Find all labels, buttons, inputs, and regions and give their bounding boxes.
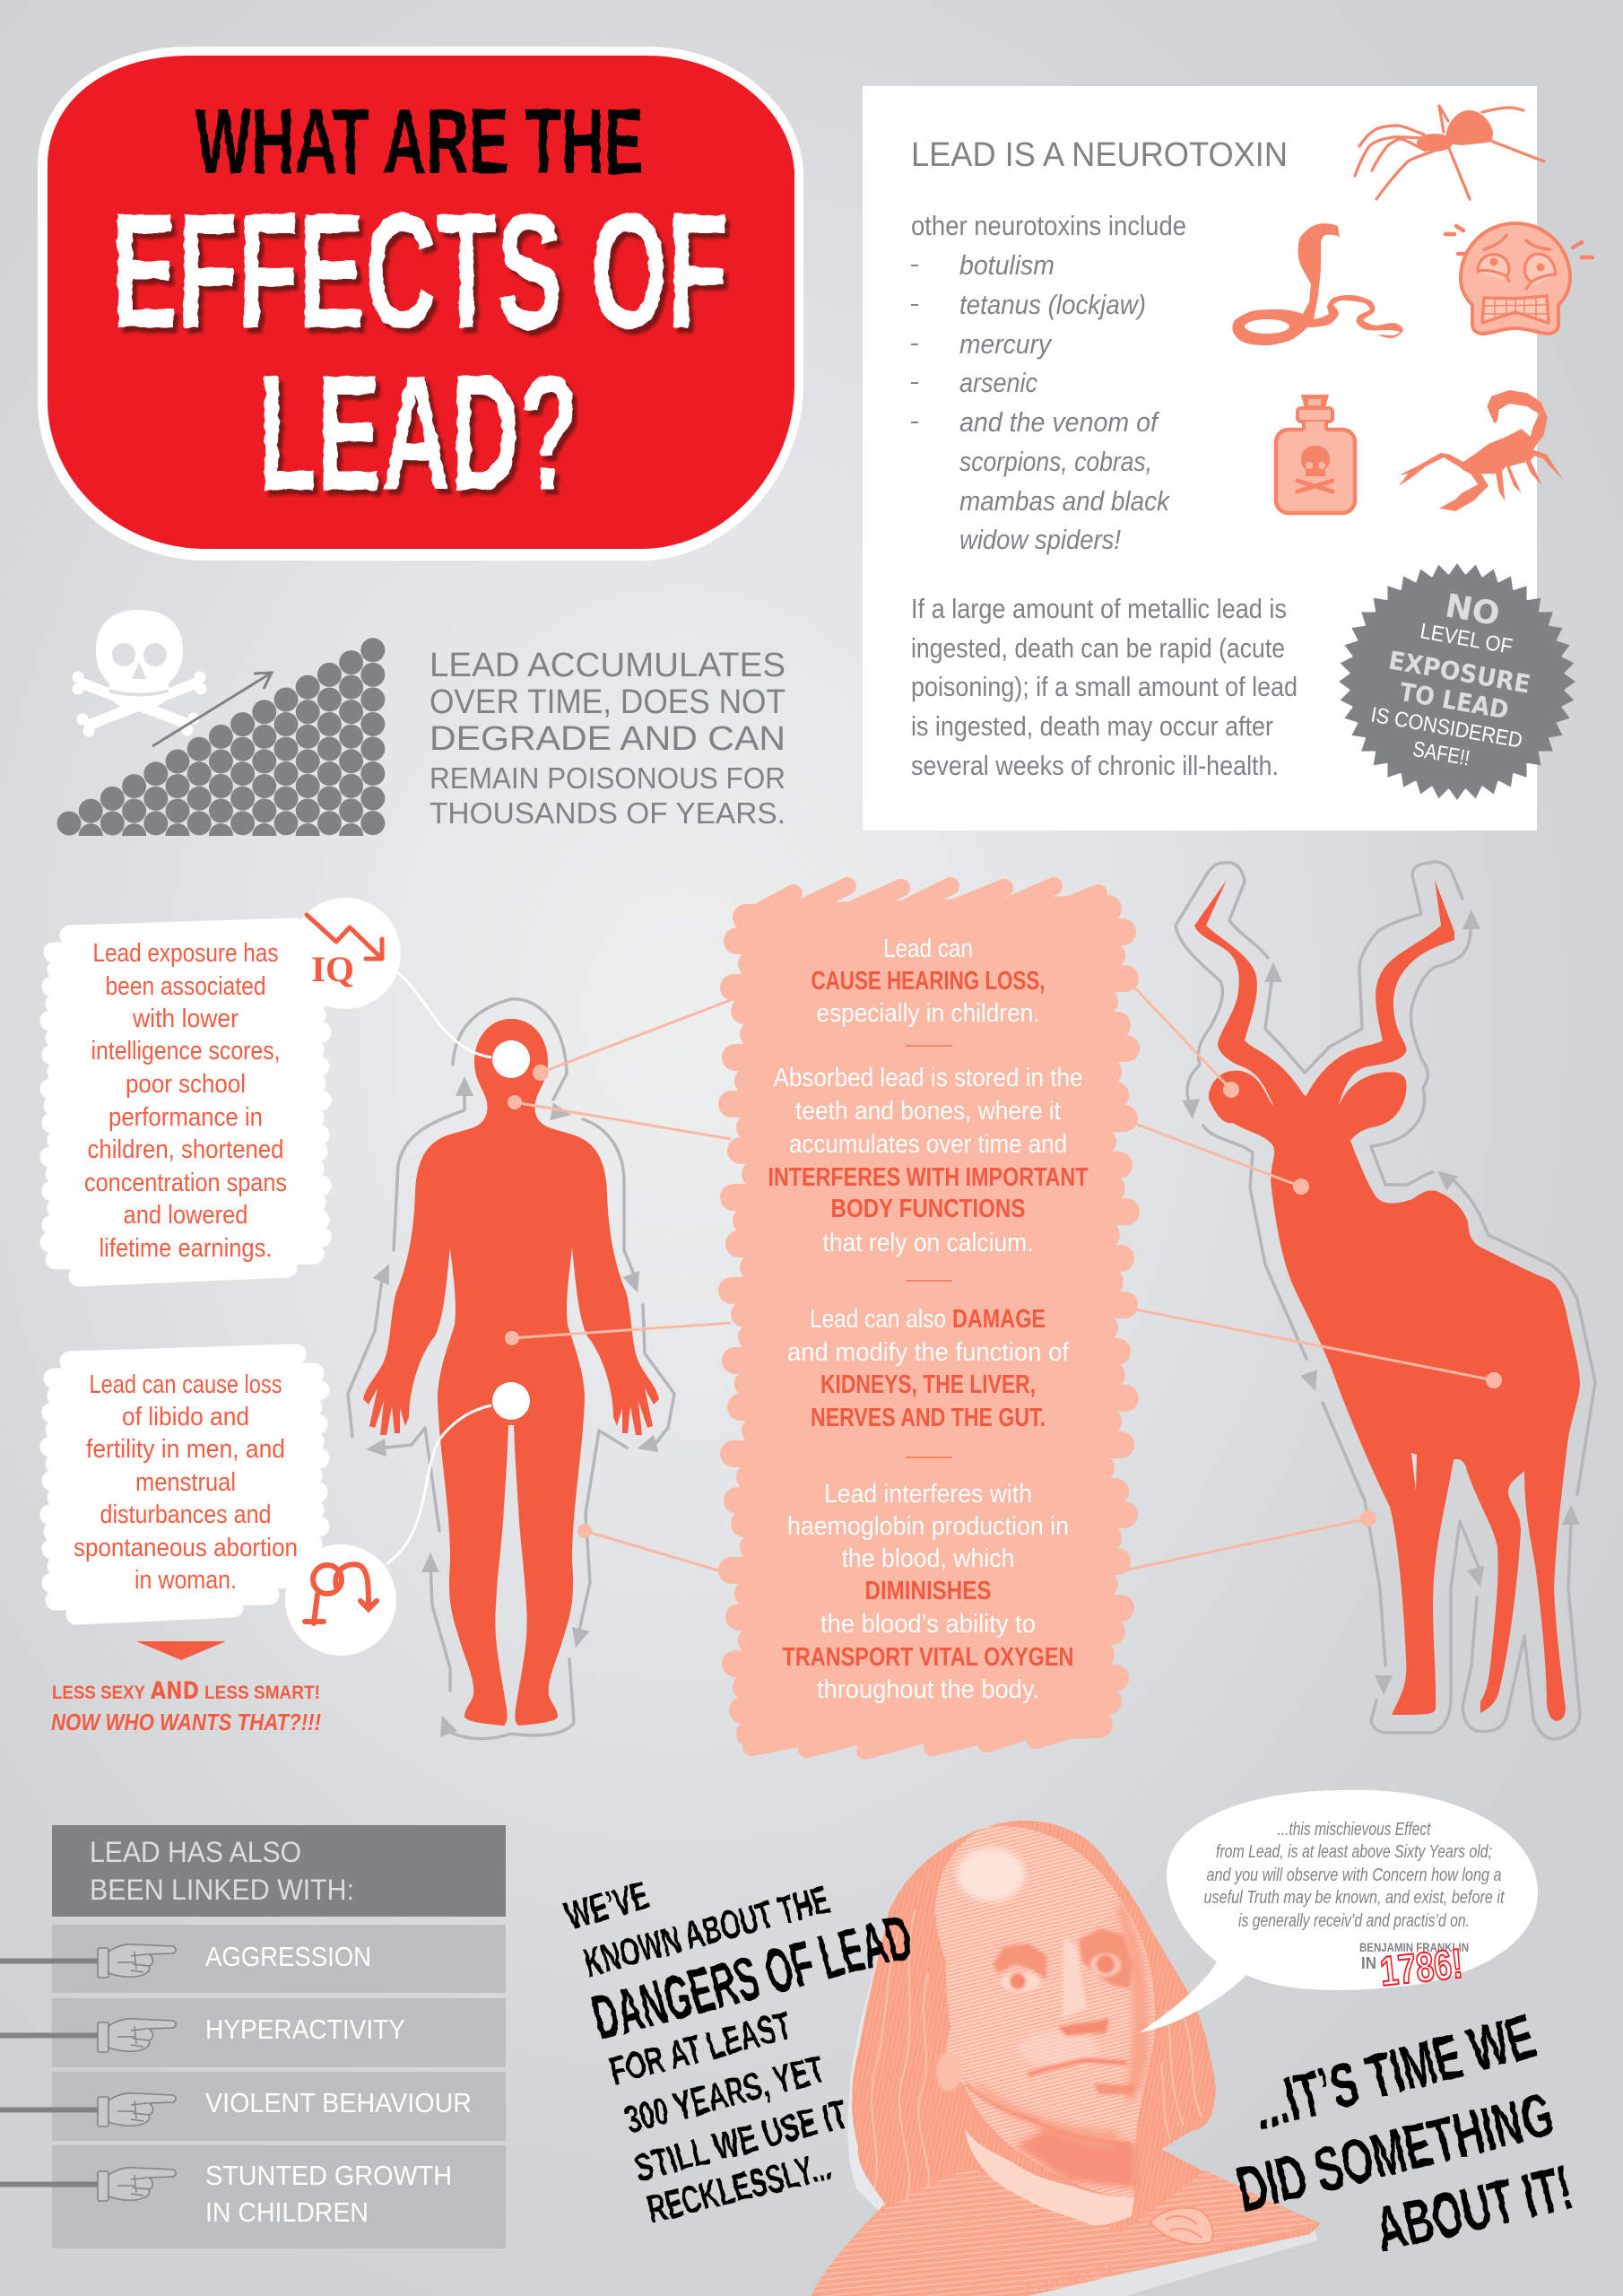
bubble shape	[1140, 1790, 1538, 2032]
text: haemoglobin: TRANSPORT VITAL OXYGEN	[782, 1643, 1074, 1672]
text: lead accumulates: THOUSANDS OF YEARS.	[430, 796, 785, 830]
icon: IQ circle	[290, 898, 401, 1009]
bubble text: menstrual	[135, 1468, 236, 1497]
bubble text	[74, 1370, 298, 1595]
icon: scorpion	[1399, 390, 1563, 511]
slogan: we've known: KNOWN ABOUT THE	[579, 1878, 834, 1986]
panel: center effects box	[732, 886, 1126, 1751]
quote text: from Lead, is at least above Sixty Years old;	[1216, 1842, 1492, 1862]
row: aggression: AGGRESSION	[205, 1941, 371, 1972]
right ear	[1339, 1072, 1406, 1141]
bubble text: been associated	[106, 972, 265, 1001]
deer circulation outline	[1176, 862, 1595, 1739]
title: lead?: LEAD?	[258, 340, 578, 525]
portrait: benjamin franklin	[811, 1821, 1321, 2296]
row: violent behaviour	[0, 2072, 506, 2141]
bubble text: in woman.	[135, 1566, 237, 1595]
header: BEEN LINKED WITH:	[90, 1874, 354, 1906]
coat	[811, 2170, 1318, 2296]
text: hearing loss: CAUSE HEARING LOSS,	[811, 967, 1046, 996]
paragraph: lead ingestion: If a large amount of metallic lead is	[911, 593, 1287, 624]
text: teeth and bones: that rely on calcium.	[823, 1229, 1033, 1257]
text: kidneys: DAMAGE	[952, 1305, 1046, 1334]
text: teeth and bones: INTERFERES WITH IMPORTANT	[768, 1163, 1089, 1192]
list of neurotoxins: arsenic	[959, 367, 1037, 398]
callout: less sexy and less smart: AND	[151, 1677, 199, 1705]
text: haemoglobin: DIMINISHES	[864, 1577, 992, 1605]
slogan: it's time	[1230, 2001, 1579, 2266]
title red fill	[48, 56, 794, 549]
text: lead accumulates: LEAD ACCUMULATES	[430, 647, 785, 684]
text: haemoglobin: the blood’s ability to	[820, 1610, 1036, 1639]
badge: no level of exposure	[1289, 514, 1623, 849]
slogan: we've known: RECKLESSLY...	[643, 2144, 836, 2232]
text: kidneys: NERVES AND THE GUT.	[811, 1404, 1046, 1432]
title: effects of: EFFECTS OF	[111, 178, 728, 362]
left horn	[1194, 880, 1305, 1105]
title panel	[38, 47, 803, 561]
face	[935, 1826, 1155, 2197]
header	[52, 1825, 506, 1917]
attribution: BENJAMIN FRANKLIN	[1359, 1940, 1469, 1954]
banknote strip	[1018, 2226, 1318, 2296]
rising arrow	[152, 673, 272, 746]
text: haemoglobin: haemoglobin production in	[787, 1512, 1069, 1541]
row: hyperactivity: HYPERACTIVITY	[205, 2013, 405, 2045]
panel background	[863, 86, 1537, 831]
text: haemoglobin: Lead interferes with	[824, 1480, 1032, 1509]
bubble text: Lead can cause loss	[90, 1370, 282, 1399]
coat and hair silhouette	[811, 1821, 1321, 2296]
bubble text: intelligence scores,	[91, 1037, 280, 1065]
list of neurotoxins: mambas and black	[959, 485, 1170, 517]
box background	[732, 886, 1126, 1751]
row: aggression	[0, 1925, 506, 1993]
connector lines	[512, 978, 1494, 1574]
slogan: we've known: FOR AT LEAST	[605, 2004, 796, 2094]
callout: less sexy and less smart: NOW WHO WANTS THAT?!!!	[51, 1709, 321, 1735]
text: kidneys	[787, 1305, 1070, 1432]
text: teeth and bones	[768, 1064, 1089, 1257]
deer figure	[1194, 880, 1580, 1721]
paragraph: lead ingestion	[911, 593, 1298, 781]
bubble shape	[50, 1354, 319, 1614]
text: lead accumulates: REMAIN POISONOUS FOR	[430, 761, 785, 795]
brows, eyes, nose and mouth	[936, 1928, 1136, 2144]
bubble text: fertility in men, and	[86, 1435, 285, 1464]
bubble text: lifetime earnings.	[99, 1234, 273, 1263]
row: violent behaviour: VIOLENT BEHAVIOUR	[205, 2087, 472, 2118]
paragraph: lead ingestion: is ingested, death may occur after	[911, 710, 1273, 742]
text: teeth and bones: teeth and bones, where it	[795, 1097, 1061, 1126]
title outline	[38, 47, 803, 561]
marker dots	[505, 1065, 1502, 1538]
text: kidneys: KIDNEYS, THE LIVER,	[820, 1370, 1036, 1399]
human figure	[363, 1019, 659, 1726]
callout: less sexy and less smart	[51, 1641, 321, 1735]
bubble: intelligence	[50, 898, 401, 1276]
bubble text: Lead exposure has	[93, 939, 278, 968]
skull and lead pile graphic	[69, 610, 373, 837]
list of neurotoxins: widow spiders!	[959, 524, 1121, 555]
row: stunted growth	[0, 2145, 506, 2248]
slogan: we've known: WE’VE	[560, 1874, 654, 1939]
bubble text: and lowered	[124, 1201, 247, 1230]
text: hearing loss: especially in children.	[816, 999, 1040, 1028]
list of neurotoxins: scorpions, cobras,	[959, 446, 1152, 477]
text: lead accumulates: OVER TIME, DOES NOT	[430, 683, 785, 721]
list of neurotoxins: and the venom of	[959, 406, 1160, 438]
text: lead accumulates: DEGRADE AND CAN	[430, 720, 785, 758]
icon: IQ circle: IQ	[311, 949, 354, 989]
quote text: ...this mischievous Effect	[1277, 1820, 1432, 1839]
collar rose	[1150, 2208, 1213, 2244]
badge: no level of exposure: EXPOSURE	[1386, 646, 1532, 700]
list of neurotoxins: other neurotoxins include	[911, 210, 1186, 241]
quote text: is generally receiv’d and practis’d on.	[1238, 1911, 1470, 1931]
row: hyperactivity	[0, 1998, 506, 2067]
text: lead accumulates	[430, 647, 785, 830]
row: stunted growth: IN CHILDREN	[205, 2196, 369, 2228]
bubble text: concentration spans	[84, 1169, 287, 1197]
year 1786: 1786!	[1378, 1940, 1465, 1995]
panel: neurotoxin	[863, 86, 1623, 849]
human circulation outline	[348, 999, 674, 1739]
slogan: we've known: 300 YEARS, YET	[621, 2047, 829, 2143]
badge: no level of exposure: SAFE!!	[1410, 737, 1471, 770]
bubble text: poor school	[126, 1070, 246, 1099]
neck cloth	[965, 2128, 1134, 2225]
text: teeth and bones: BODY FUNCTIONS	[830, 1195, 1026, 1223]
text: kidneys: and modify the function of	[787, 1338, 1070, 1367]
text: teeth and bones: Absorbed lead is stored in the	[773, 1064, 1083, 1092]
header: LEAD HAS ALSO	[90, 1836, 301, 1868]
bubble text: with lower	[132, 1004, 239, 1033]
title: what are the: WHAT ARE THE	[195, 90, 644, 193]
bubble text: disturbances and	[100, 1500, 271, 1529]
paragraph: lead ingestion: ingested, death can be rapid (acute	[911, 632, 1285, 664]
paragraph: lead ingestion: several weeks of chronic ill-health.	[911, 750, 1279, 781]
text: hearing loss	[811, 935, 1046, 1028]
quote text: useful Truth may be known, and exist, before it	[1203, 1888, 1506, 1908]
paragraph: lead ingestion: poisoning); if a small amount of lead	[911, 671, 1298, 702]
badge: no level of exposure: IS CONSIDERED	[1369, 702, 1524, 753]
icon: skull and crossbones	[78, 610, 201, 731]
icon: gender symbols circle	[285, 1544, 396, 1656]
text: haemoglobin: the blood, which	[841, 1544, 1015, 1573]
icon: poison bottle	[1276, 395, 1355, 513]
list of neurotoxins: botulism	[959, 249, 1055, 281]
list of neurotoxins: tetanus (lockjaw)	[959, 289, 1146, 320]
deer body	[1209, 1071, 1580, 1721]
soft facial shading	[957, 1848, 1149, 2188]
slogan: we've known	[560, 1874, 918, 2232]
icon: scared face	[1445, 223, 1593, 334]
text: kidneys: Lead can also	[810, 1305, 946, 1334]
badge: no level of exposure: NO	[1443, 587, 1502, 633]
white nodes and curves	[386, 970, 530, 1564]
bubble text: spontaneous abortion	[74, 1534, 298, 1562]
quote text	[1203, 1820, 1506, 1931]
text: haemoglobin	[782, 1480, 1074, 1704]
icon: spider	[1355, 106, 1544, 199]
bubble text: of libido and	[122, 1403, 249, 1431]
slogan: we've known: STILL WE USE IT	[630, 2092, 852, 2191]
text: haemoglobin: throughout the body.	[817, 1675, 1039, 1704]
arrowheads	[1182, 909, 1580, 1695]
callout: less sexy and less smart: LESS SEXY	[52, 1683, 145, 1703]
bubble shape	[50, 928, 321, 1276]
arrowheads	[365, 1076, 658, 1737]
list of neurotoxins	[911, 210, 1186, 555]
row: stunted growth: STUNTED GROWTH	[205, 2160, 452, 2191]
bubble text: performance in	[108, 1103, 263, 1132]
heading: lead is a neurotoxin: LEAD IS A NEUROTOXIN	[911, 136, 1288, 174]
badge: no level of exposure: LEVEL OF	[1419, 619, 1515, 659]
text: hearing loss: Lead can	[883, 935, 973, 963]
icon: cobra	[1232, 223, 1403, 345]
badge: no level of exposure: TO LEAD	[1397, 677, 1511, 726]
speech bubble: franklin quote	[1140, 1790, 1538, 2032]
lead ball pile	[69, 650, 373, 837]
attribution: in: IN	[1361, 1954, 1376, 1972]
hair strands	[872, 1910, 1202, 2202]
bubble text: children, shortened	[88, 1135, 283, 1164]
text: teeth and bones: accumulates over time and	[789, 1130, 1067, 1159]
panel: lead has also been linked with	[0, 1825, 506, 2248]
bubble text	[84, 939, 287, 1263]
silhouette shadow	[847, 1922, 897, 2215]
quote text: and you will observe with Concern how long a	[1207, 1866, 1501, 1885]
bubble: fertility	[50, 1354, 396, 1656]
list of neurotoxins: mercury	[959, 328, 1053, 360]
callout: less sexy and less smart: LESS SMART!	[204, 1683, 320, 1703]
right horn	[1306, 880, 1454, 1105]
slogan: we've known: DANGERS OF LEAD	[586, 1901, 918, 2053]
